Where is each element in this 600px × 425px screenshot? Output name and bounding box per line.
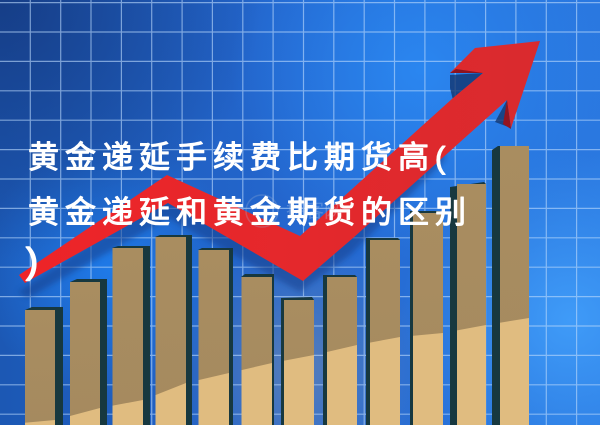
- bar faces: [25, 146, 529, 425]
- watermark logo: [246, 195, 343, 227]
- title text: [26, 140, 472, 281]
- red rising arrow: [19, 41, 540, 283]
- bar side shadows: [25, 146, 529, 425]
- arrow shadow on the grid: [18, 130, 445, 298]
- bar chart: [25, 146, 529, 425]
- arrow fold shadows: [450, 73, 483, 100]
- title text: 黄金递延和黄金期货的区别: [28, 195, 472, 230]
- arrow darker folds: [450, 69, 483, 73]
- title text: ): [26, 240, 44, 281]
- sunlit lower portion of bars: [25, 318, 529, 425]
- arrow body: [19, 41, 540, 283]
- watermark logo: 探客网: [286, 200, 343, 222]
- title text: 黄金递延手续费比期货高(: [28, 140, 451, 175]
